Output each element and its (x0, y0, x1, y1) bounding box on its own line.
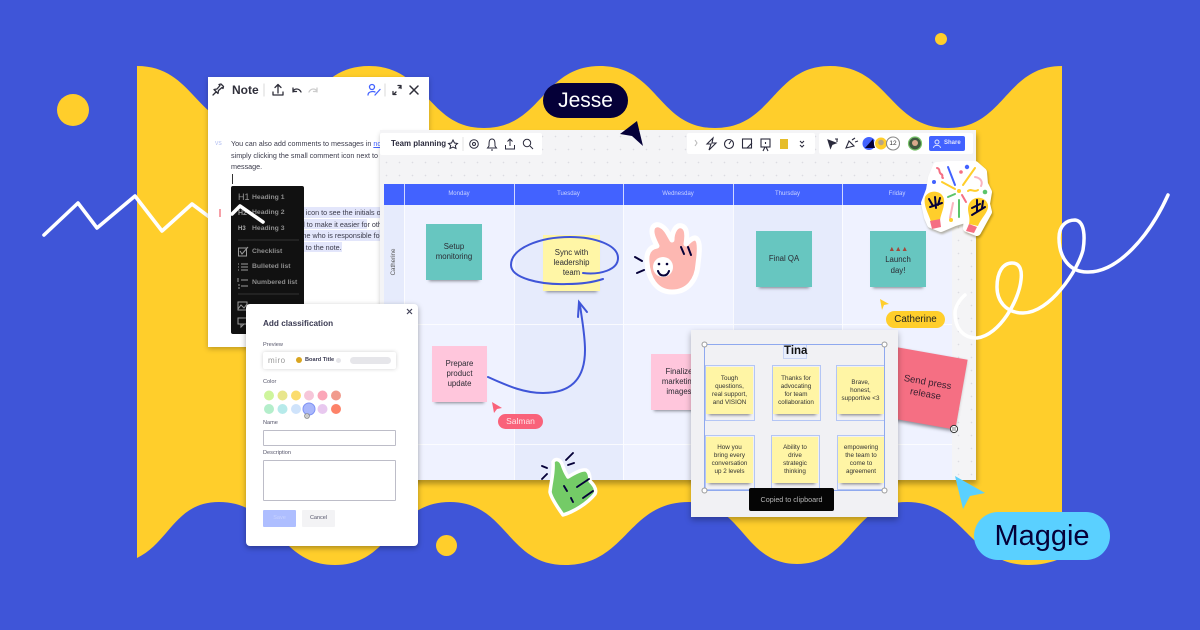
cancel button (302, 510, 335, 527)
tina heading: Tina (784, 345, 807, 357)
share button (929, 136, 965, 151)
heading two: Heading 2 (252, 209, 284, 216)
note: empowering the team: come to (850, 460, 872, 467)
note paragraph one (231, 139, 380, 171)
note: tough questions (706, 367, 753, 414)
sticky: prepare product update (432, 346, 487, 402)
close icon (406, 308, 412, 314)
maggie pointer (955, 476, 985, 509)
sticky: send press release (885, 347, 967, 429)
status dot (336, 358, 341, 363)
note: how you bring: How you (717, 444, 742, 451)
note: empowering the team: empowering (844, 444, 878, 451)
sticky: send press release: Send press (903, 372, 952, 391)
selection frame (702, 342, 888, 494)
note: ability to drive: drive (788, 452, 802, 459)
sticky: sync with leadership team: Sync with (555, 248, 588, 257)
color swatches (264, 390, 341, 419)
menu items (238, 192, 299, 328)
copied to clipboard toast (749, 488, 834, 511)
description input (263, 460, 396, 501)
right toolbar collaborators (819, 133, 973, 154)
dialog title: Add classification (263, 319, 333, 328)
name label: Name (263, 420, 278, 426)
save button: Save (273, 515, 286, 521)
bulleted list: Bulleted list (252, 263, 291, 270)
placeholder pill (350, 357, 391, 364)
note: tough questions: questions, (715, 382, 744, 390)
heading three: H3 (238, 226, 246, 232)
note: ability to drive: strategic (783, 460, 807, 467)
avatar count: 12 (889, 140, 897, 147)
wednesday: Wednesday (662, 191, 694, 197)
copied to clipboard toast: Copied to clipboard (761, 495, 822, 504)
cursor label: salman (492, 402, 543, 429)
sticky: prepare product update: product (446, 369, 472, 378)
panel: team planning board (380, 130, 976, 480)
board title: Board Title (305, 357, 334, 363)
note: tough questions: Tough (721, 374, 738, 382)
jesse tag (543, 83, 628, 118)
sticky outlines (705, 365, 884, 490)
sticky: sync with leadership team: leadership (554, 258, 589, 267)
name input (263, 430, 396, 446)
sticky: finalize marketing images: Finalize (666, 367, 692, 376)
checklist: Checklist (252, 248, 282, 255)
friday: Friday (889, 191, 905, 197)
note title: Note (232, 83, 259, 97)
note paragraph two highlighted (231, 207, 380, 252)
cursor label: jesse (543, 83, 643, 146)
share button: Share (944, 140, 961, 146)
note: empowering the team: the team to (845, 452, 877, 459)
decorative yellow circle small (935, 33, 947, 45)
monday: Monday (448, 191, 470, 197)
sticky: finalize marketing images (651, 354, 707, 410)
catherine pointer (880, 299, 889, 310)
note: brave honest supportive: honest, (850, 386, 871, 394)
sticky: final qa: Final QA (769, 254, 799, 263)
catherine tag: Catherine (894, 314, 937, 325)
red comment marker (219, 209, 221, 217)
save button (263, 510, 296, 527)
heading one: Heading 1 (252, 194, 284, 201)
note: empowering the team (838, 437, 884, 483)
right toolbar tools (687, 133, 815, 154)
heading two: H2 (238, 210, 247, 217)
cursor label: catherine (880, 299, 945, 328)
header bar (384, 184, 952, 205)
note: thanks for advocating: for team (784, 390, 808, 398)
sticky: launch day: day! (891, 266, 905, 275)
note: tough questions: and VISION (713, 398, 746, 406)
maggie tag: Maggie (994, 520, 1090, 552)
note paragraph one: message. (231, 162, 262, 171)
note: ability to drive (772, 437, 818, 483)
heading three (238, 225, 284, 232)
note: how you bring: conversation (712, 460, 747, 467)
note: brave honest supportive: Brave, (851, 378, 870, 386)
salman pointer (492, 402, 502, 413)
note: ability to drive: Ability to (783, 444, 807, 451)
salman tag (498, 414, 543, 429)
tuesday: Tuesday (557, 191, 580, 197)
decorative yellow circle bottom (436, 535, 457, 556)
sticky: setup monitoring: Setup (444, 242, 464, 251)
sticky: sync with leadership team (543, 235, 600, 291)
miro wordmark: miro (268, 356, 286, 365)
salman tag: Salman (506, 416, 535, 426)
note: thanks for advocating: collaboration (778, 398, 814, 406)
weekday column stripes (384, 205, 404, 480)
cursor label: maggie (955, 476, 1110, 560)
cancel button: Cancel (310, 515, 327, 521)
sticky: sync with leadership team: team (563, 268, 580, 277)
heading one (238, 192, 284, 202)
left toolbar (380, 133, 542, 155)
note author initials: VS (215, 141, 222, 147)
sticky: finalize marketing images: images (666, 387, 692, 396)
note: ability to drive: thinking (784, 468, 806, 475)
note paragraph two highlighted: contributors to determine who is responsible for (231, 231, 380, 240)
preview label: Preview (263, 342, 283, 348)
sticky: launch day: ▲▲▲ (888, 246, 908, 253)
catherine tag (886, 311, 945, 328)
sticky: send press release: release (909, 385, 941, 402)
heading one: H1 (238, 192, 250, 202)
text caret (232, 174, 233, 184)
maggie tag (974, 512, 1110, 560)
note: brave honest supportive (837, 367, 884, 414)
note: how you bring (706, 437, 753, 483)
thursday stripe (733, 205, 842, 480)
thursday: Thursday (775, 191, 800, 197)
note: empowering the team: agreement (846, 468, 876, 475)
board title: Team planning (391, 139, 446, 148)
note: thanks for advocating: Thanks for (781, 374, 811, 382)
preview bar (263, 352, 396, 369)
row label catherine: Catherine (390, 249, 397, 275)
heading three: Heading 3 (252, 225, 284, 232)
menu icons (238, 240, 299, 328)
description label: Description (263, 450, 291, 456)
heading two (238, 209, 284, 217)
note: thanks for advocating (773, 367, 819, 414)
grid lines (404, 184, 952, 480)
sticky: prepare product update: Prepare (446, 359, 473, 368)
share icon (933, 140, 941, 148)
tool icons (694, 136, 804, 152)
decorative yellow circle large (57, 94, 89, 126)
left toolbar icons (448, 137, 534, 151)
note: tough questions: real support, (712, 390, 747, 398)
jesse tag: Jesse (558, 89, 613, 112)
note: brave honest supportive: supportive <3 (842, 394, 879, 402)
note: thanks for advocating: advocating (781, 382, 811, 390)
sticky: prepare product update: update (448, 379, 471, 388)
note: how you bring: up 2 levels (714, 468, 745, 475)
panel: add classification dialog (246, 304, 418, 546)
sticky: setup monitoring (426, 224, 482, 280)
note: how you bring: bring every (714, 452, 745, 459)
panel: tina appreciation board (691, 330, 898, 517)
calendar grid (384, 184, 952, 480)
note header (212, 83, 419, 97)
sticky: final qa (756, 231, 812, 287)
jesse pointer (620, 121, 643, 146)
sticky: launch day (870, 231, 926, 287)
numbered list: Numbered list (252, 279, 297, 286)
weekday labels (448, 190, 906, 197)
black formatting menu (231, 186, 304, 334)
collaborator icons (827, 136, 922, 151)
sticky: finalize marketing images: marketing (662, 377, 696, 386)
note header icons (212, 83, 419, 96)
panel: note document (208, 77, 429, 347)
board title badge (296, 357, 302, 363)
color label: Color (263, 379, 276, 385)
tuesday stripe (514, 205, 623, 480)
sticky: setup monitoring: monitoring (436, 252, 472, 261)
sticky: launch day: Launch (885, 255, 911, 264)
